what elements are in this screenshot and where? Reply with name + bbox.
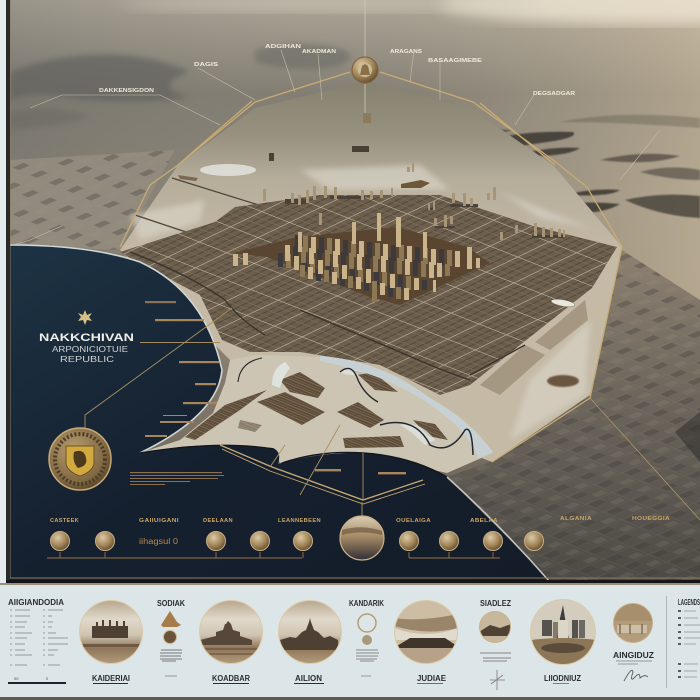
medallion row labels: OUELAIGA bbox=[396, 518, 431, 524]
heading and crest: Sodiak bbox=[157, 599, 185, 676]
terrain labels: BASAAGIMEBE bbox=[428, 58, 482, 64]
terrain labels: AKADMAN bbox=[302, 49, 336, 55]
caption: Koadbar: KOADBAR bbox=[212, 674, 250, 683]
heading and photo: Siadlez: SIADLEZ bbox=[480, 599, 511, 608]
tan rule bbox=[0, 583, 700, 585]
road to salt flats bbox=[136, 177, 258, 232]
title: REPUBLIC bbox=[60, 355, 114, 364]
pale flats bbox=[130, 165, 590, 440]
medallion row labels: iihagsul 0 bbox=[139, 537, 179, 546]
compass sketch bbox=[490, 670, 505, 690]
legend list: right bbox=[678, 598, 700, 677]
bottom panel bbox=[8, 596, 700, 690]
dark scrub patch bbox=[547, 375, 579, 387]
salt lake bbox=[200, 164, 256, 176]
legend list: left: 50 bbox=[14, 676, 19, 681]
top medallion bbox=[352, 57, 378, 83]
medallion row labels: CASTEEK bbox=[50, 518, 79, 524]
caption: Liiodniuz: LIIODNIUZ bbox=[544, 674, 581, 683]
city grid bbox=[120, 195, 617, 395]
title star bbox=[78, 310, 92, 325]
bottom page edge bbox=[0, 697, 700, 700]
terrain labels: DAKKENSIGDON bbox=[99, 88, 154, 94]
delta bright ponds bbox=[272, 362, 435, 445]
heading and photo: Siadlez bbox=[479, 599, 511, 661]
photo: Judiae bbox=[394, 600, 458, 664]
medallion row baseline bbox=[47, 552, 500, 558]
legend list: left: 0 bbox=[46, 676, 49, 681]
airship bbox=[551, 299, 575, 307]
skyline dark towers bbox=[278, 235, 444, 297]
mountains: right range bbox=[501, 114, 700, 219]
terrain labels: DEGSADGAR bbox=[533, 91, 575, 97]
skyline base bbox=[233, 227, 490, 305]
heading and crest: Sodiak: SODIAK bbox=[157, 599, 185, 608]
title bbox=[40, 334, 133, 362]
skyline mid towers bbox=[286, 236, 452, 302]
medallion row labels: ALGANIA bbox=[560, 516, 592, 522]
brown blotches on lower plain bbox=[480, 300, 588, 395]
caption: Ailion: AILION bbox=[295, 674, 322, 683]
medallion row labels bbox=[50, 516, 670, 546]
legend list: left: AIIGIANDODIA bbox=[8, 598, 64, 607]
terrain labels: ADGIHAN bbox=[265, 44, 301, 50]
terrain backdrop bbox=[10, 0, 700, 477]
satellite clusters bbox=[263, 163, 565, 240]
sea bbox=[10, 245, 552, 582]
medallion row labels: ABELAA bbox=[470, 518, 498, 524]
title: ARPONICIOTUIE bbox=[52, 345, 128, 354]
coat of arms bbox=[49, 428, 111, 490]
medallion row labels: LEANNEBEEN bbox=[278, 518, 321, 524]
photo: Koadbar bbox=[199, 600, 263, 664]
caption: Kaideriai: KAIDERIAI bbox=[92, 674, 130, 683]
medallion row labels: DEELAAN bbox=[203, 518, 233, 524]
signature bbox=[624, 670, 648, 681]
dark ring road bbox=[130, 252, 525, 380]
farmland: left bbox=[10, 150, 175, 250]
map dark edge bbox=[6, 0, 10, 584]
caption: Judiae: JUDIAE bbox=[417, 674, 447, 683]
legend list: left bbox=[8, 598, 68, 684]
photo: Aingiduz: AINGIDUZ bbox=[613, 651, 654, 660]
gold boundary lines bbox=[10, 0, 700, 520]
photo: Liiodniuz bbox=[530, 599, 597, 665]
photo: Aingiduz bbox=[613, 603, 654, 664]
terrain labels bbox=[99, 44, 575, 97]
photo: Kaideriai bbox=[79, 600, 143, 664]
sea callout labels bbox=[140, 301, 406, 474]
small plants on the plain bbox=[178, 113, 371, 181]
map bottom border bbox=[6, 580, 700, 583]
downtown skyline bbox=[233, 213, 490, 305]
terrain labels: DAGIS bbox=[194, 62, 218, 68]
delta blocks bbox=[185, 370, 448, 448]
heading and crest: Kandarik bbox=[349, 599, 384, 676]
sea paragraph bbox=[130, 472, 224, 485]
title: NAKKCHIVAN bbox=[39, 332, 134, 344]
skyline bright towers bbox=[233, 213, 480, 300]
farmland: lower right bbox=[447, 250, 700, 582]
vertical divider bbox=[666, 596, 667, 688]
mountains: left range bbox=[10, 44, 350, 130]
river bbox=[238, 356, 493, 458]
medallion row labels: GAIIUIGANI bbox=[139, 518, 179, 524]
heading and crest: Kandarik: KANDARIK bbox=[349, 599, 384, 608]
large medallion bbox=[340, 502, 384, 560]
delta land bbox=[140, 355, 493, 473]
plain inside boundary bbox=[120, 82, 622, 462]
photo: Ailion bbox=[278, 600, 342, 664]
terrain labels: ARAGANS bbox=[390, 49, 422, 55]
left margin strip bbox=[0, 0, 6, 585]
small medallions bbox=[50, 532, 544, 550]
medallion row labels: HOUEGGIA bbox=[632, 516, 670, 522]
